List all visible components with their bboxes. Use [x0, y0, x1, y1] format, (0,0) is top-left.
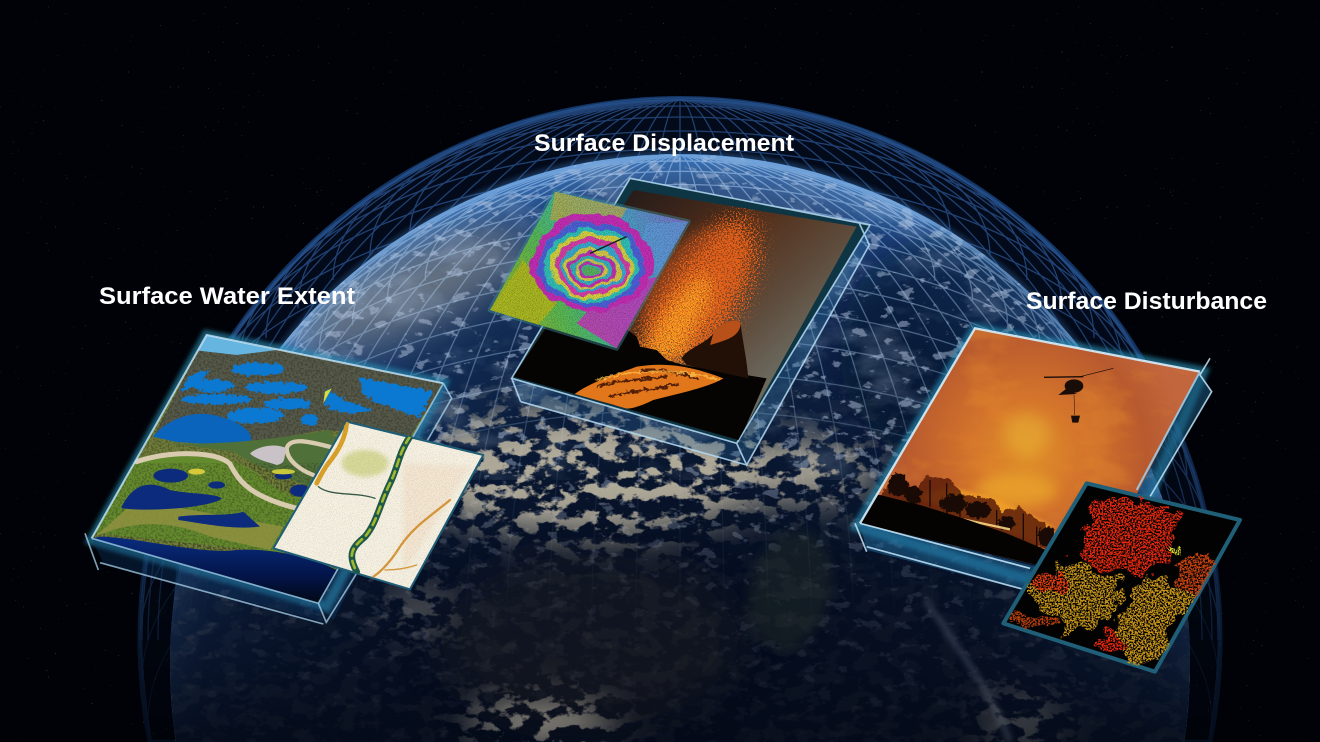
upper lakes — [180, 362, 433, 426]
meandering river — [137, 441, 332, 508]
panel: surface disturbance — [855, 328, 1240, 672]
heading: surface water extent: Surface Water Extent — [99, 283, 355, 310]
heading: surface displacement: Surface Displacement — [534, 130, 794, 157]
lava flow — [573, 365, 723, 409]
clouds and land — [170, 150, 1190, 742]
interferogram overlay — [490, 190, 690, 350]
box volume — [512, 378, 747, 465]
wildfire photo — [860, 328, 1200, 565]
heading: surface disturbance: Surface Disturbance — [1026, 288, 1267, 315]
box volume — [92, 538, 323, 622]
black ground — [513, 327, 767, 443]
grid shell — [140, 98, 1220, 742]
panel: surface water extent — [85, 333, 483, 624]
lava fountain — [633, 210, 759, 370]
navy lakes — [122, 469, 310, 528]
green marsh — [97, 455, 310, 553]
panel glow — [92, 335, 443, 607]
limb glow — [276, 148, 1161, 492]
earth disc — [170, 154, 1190, 742]
flames at base — [932, 486, 1054, 532]
volcano photo — [513, 190, 857, 443]
grey pond — [250, 446, 287, 465]
tree line — [880, 475, 1053, 550]
deep water foreground — [92, 537, 337, 603]
panel glow — [857, 328, 1203, 580]
frame base — [512, 178, 870, 443]
panel bright edges — [860, 328, 1200, 523]
burn severity map overlay — [1003, 483, 1240, 672]
earth grid lines — [280, 154, 1162, 562]
black ground — [860, 495, 1050, 565]
yellow shallows — [188, 469, 205, 475]
large blue lake — [153, 414, 251, 444]
helicopter — [1044, 368, 1113, 423]
wetland photo — [90, 333, 447, 607]
box volume — [860, 523, 1037, 590]
water extent map overlay — [273, 422, 483, 590]
panel: surface displacement — [490, 178, 870, 465]
globe — [140, 98, 1220, 742]
rock mound — [682, 320, 748, 378]
panel bright edges — [92, 335, 443, 538]
